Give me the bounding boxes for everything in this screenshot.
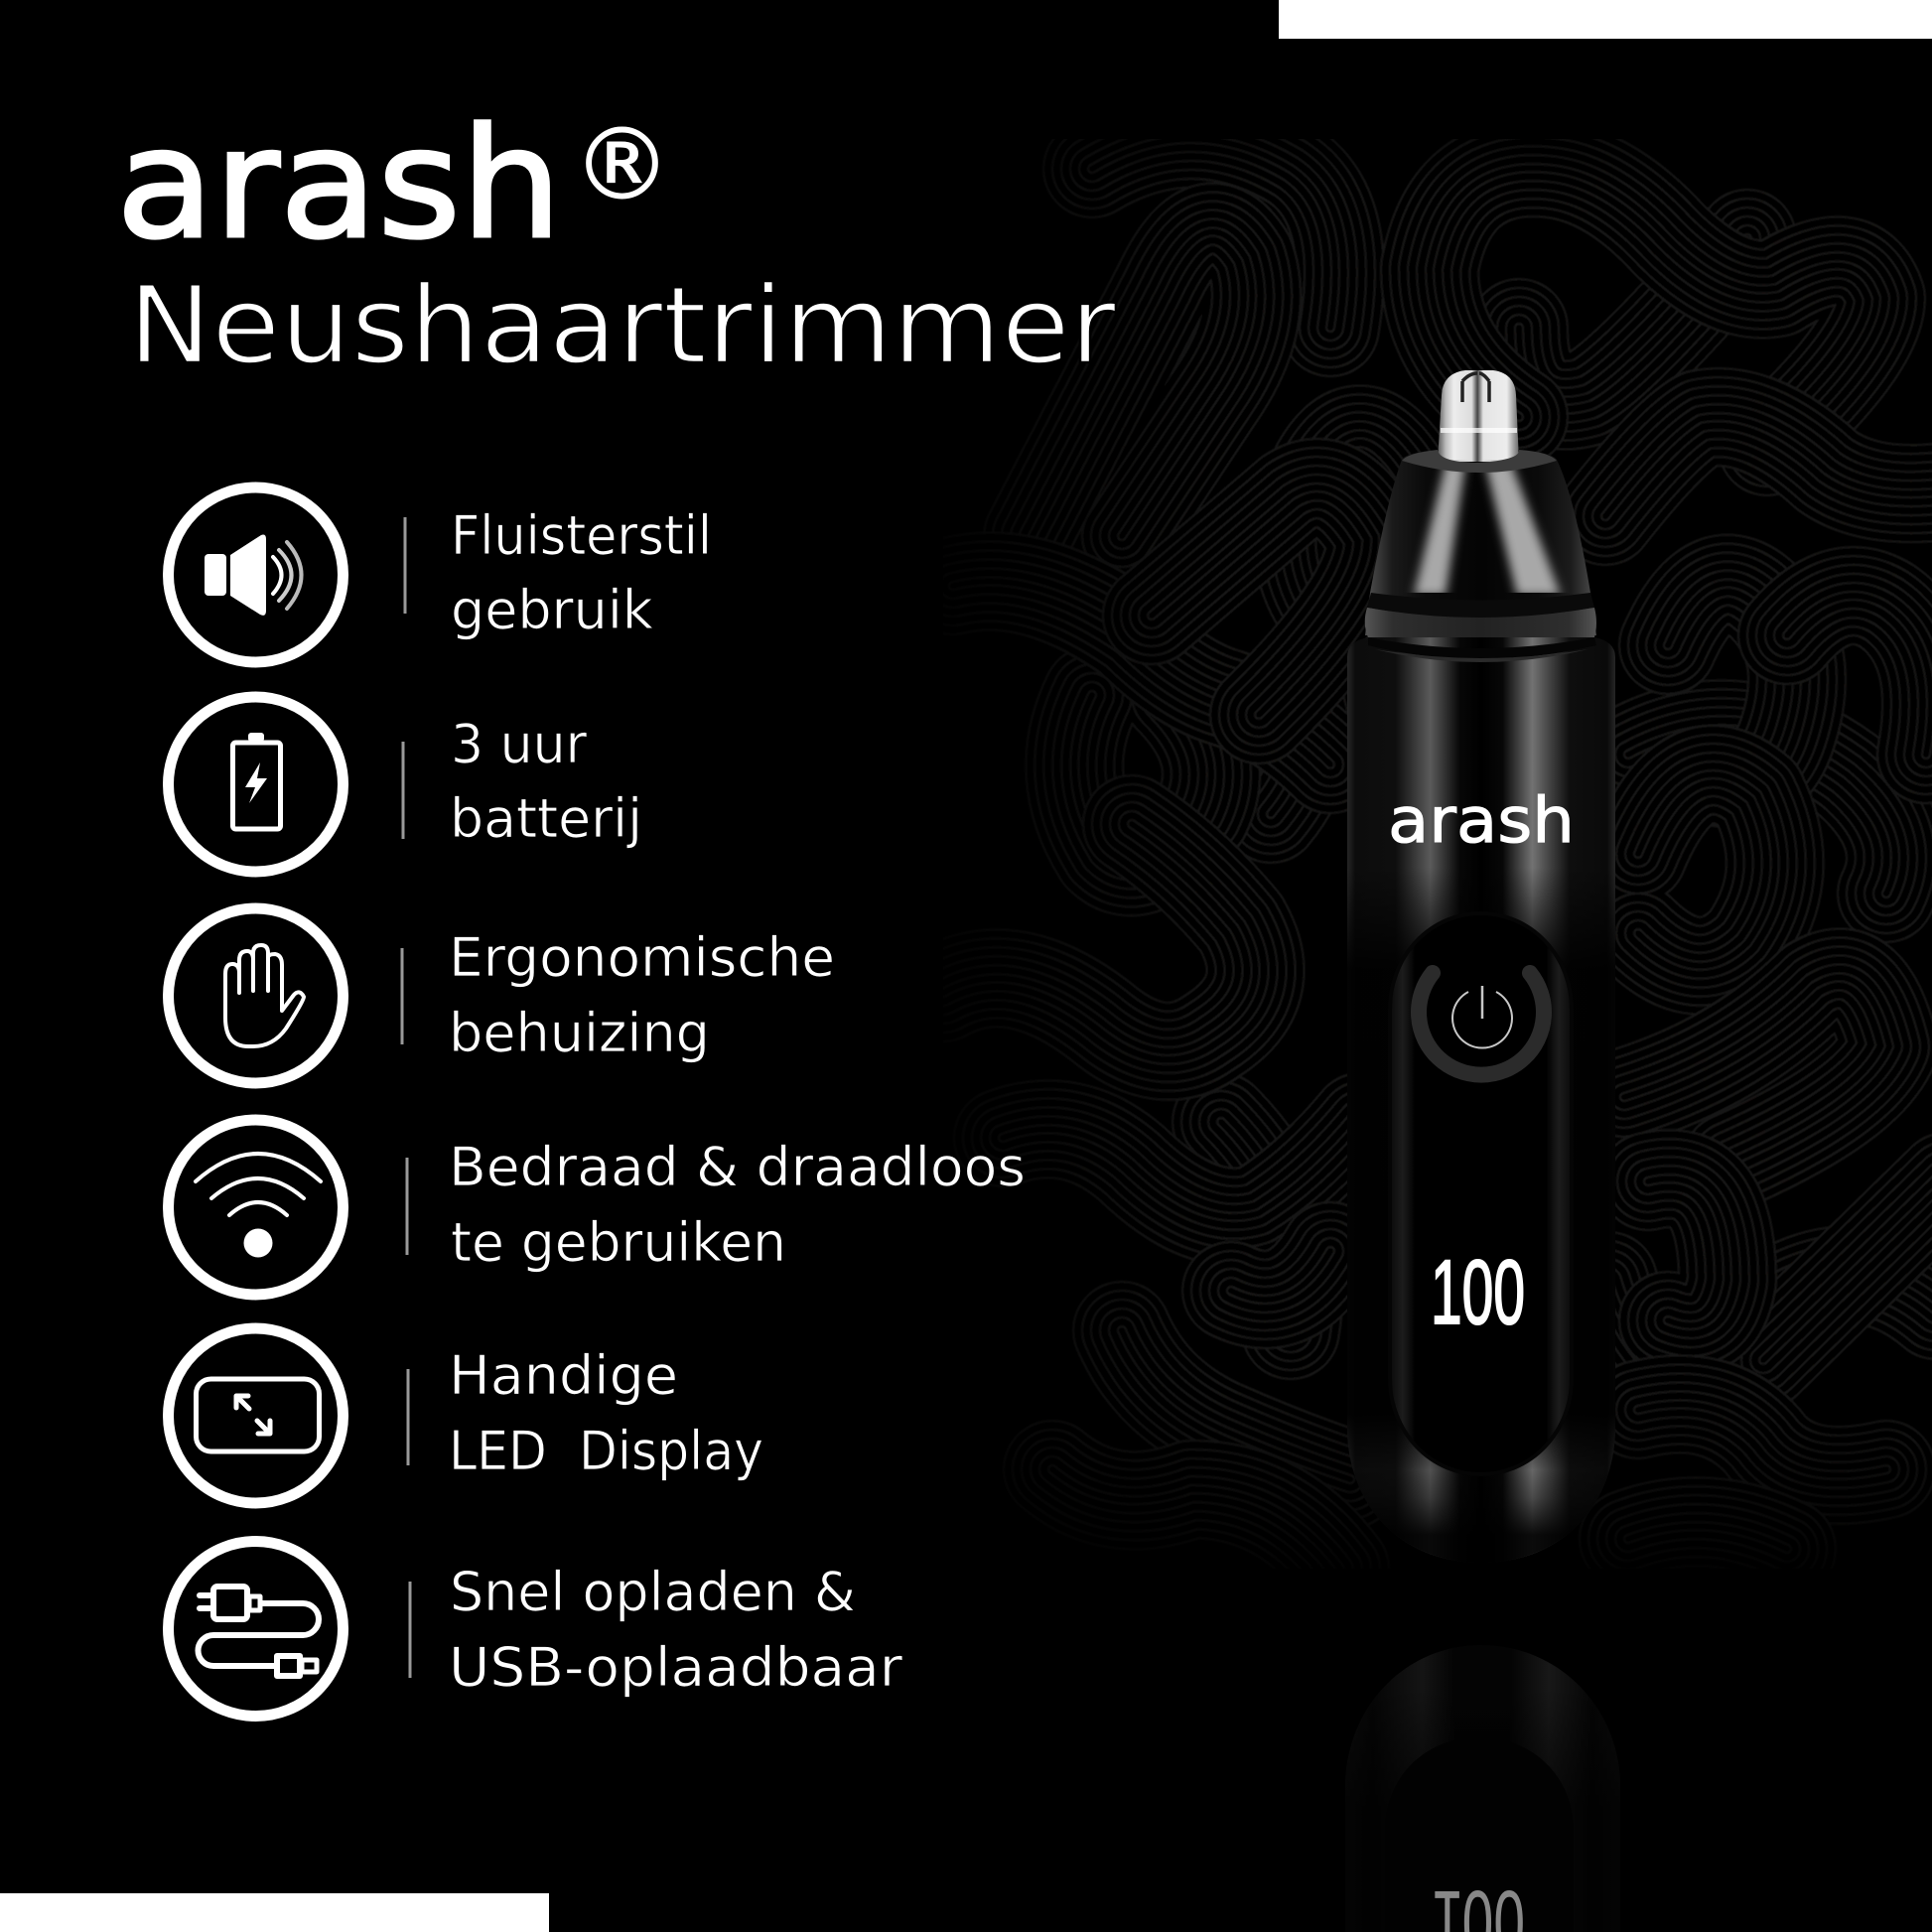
handle body <box>1347 635 1615 1563</box>
label: Snel opladen & <box>450 1561 856 1623</box>
label: te gebruiken <box>451 1211 786 1274</box>
label: LED Display <box>449 1420 763 1482</box>
label <box>449 926 835 1064</box>
label <box>450 713 642 850</box>
icon: display with arrows <box>169 1328 344 1503</box>
label: behuizing <box>449 1002 710 1064</box>
brand name: arash <box>116 96 562 273</box>
power button <box>1419 973 1544 1075</box>
icon: battery <box>169 697 344 872</box>
separator <box>407 1369 409 1465</box>
label: batterij <box>450 787 642 850</box>
title block <box>116 96 1117 388</box>
feature: Snel opladen & USB-oplaadbaar <box>169 1541 903 1716</box>
reflected handle <box>1345 1645 1620 1932</box>
feature: Fluisterstil gebruik <box>169 487 712 662</box>
icon: charging cable <box>169 1541 344 1716</box>
white corner bar: bottom left <box>0 1893 549 1932</box>
feature: Ergonomische behuizing <box>169 908 835 1083</box>
label <box>449 1344 763 1482</box>
label <box>451 504 712 641</box>
registered mark: ® <box>573 108 671 222</box>
background pattern: woven line texture <box>1015 139 1932 1521</box>
control panel <box>1390 913 1572 1474</box>
label: Handige <box>449 1344 678 1407</box>
icon: wifi <box>169 1120 344 1295</box>
label <box>449 1561 903 1699</box>
feature: 3 uur batterij <box>169 697 642 872</box>
separator <box>401 948 403 1044</box>
icon: hand <box>169 908 344 1083</box>
separator <box>403 517 407 614</box>
label: Ergonomische <box>449 926 835 989</box>
cutter head <box>1438 370 1519 462</box>
separator <box>409 1582 411 1678</box>
label: 3 uur <box>451 713 588 775</box>
label: USB-oplaadbaar <box>449 1636 903 1699</box>
label: Fluisterstil <box>451 504 712 567</box>
product name: Neushaartrimmer <box>128 264 1117 388</box>
label: gebruik <box>451 579 654 641</box>
battery display: 100 <box>1431 1242 1525 1343</box>
separator <box>405 1158 409 1255</box>
product reflection <box>1345 1645 1620 1932</box>
icon: speaker <box>169 487 344 662</box>
feature: Bedraad & draadloos te gebruiken <box>169 1120 1026 1295</box>
white corner bar: top right <box>1279 0 1932 39</box>
separator <box>401 742 405 839</box>
feature: Handige LED Display <box>169 1328 763 1503</box>
brand name on handle: arash <box>1388 784 1575 857</box>
cone collar <box>1365 450 1596 646</box>
label <box>449 1136 1026 1274</box>
reflected panel <box>1385 1737 1574 1932</box>
product: nose hair trimmer <box>1347 370 1615 1563</box>
label: Bedraad & draadloos <box>449 1136 1026 1198</box>
